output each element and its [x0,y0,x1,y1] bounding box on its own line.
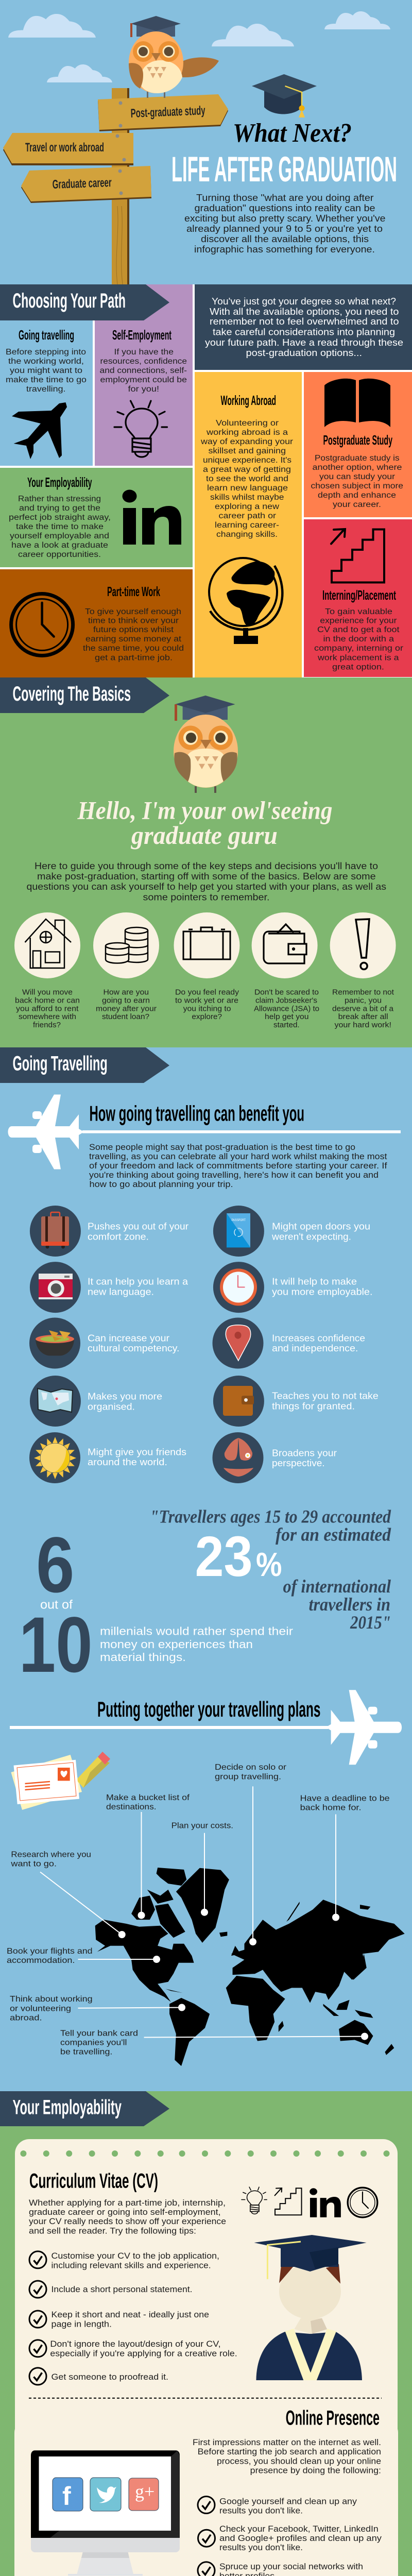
text block [29,2198,226,2235]
quote: travellers 23 percent: for an estimated [276,1524,391,1545]
captions: friends? [33,1021,61,1029]
text block: presence by doing the following: [250,2465,381,2475]
intro paragraph: exciting but also pretty scary. Whether you've [184,213,385,224]
icon: clock [11,594,73,655]
icon: passport: PASSPORT [232,1219,246,1222]
text block: working abroad is a [206,428,288,437]
heading: Working Abroad [220,393,276,408]
intro paragraph [184,193,385,255]
captions: going to earn [102,996,150,1005]
panel: your employability [0,468,193,567]
intro paragraph: discover all the available options, this [201,234,369,244]
world map [95,1868,405,2066]
text block: for you! [128,385,159,394]
map callouts: destinations. [106,1803,157,1811]
captions: Do you feel ready [175,988,239,996]
text block: your future path. Have a read through these [205,337,403,348]
text block: and connections, self- [100,366,187,375]
benefit labels: Can increase your [88,1333,169,1343]
text block: changing skills. [216,530,278,539]
map callouts: Book your flights and [7,1947,93,1956]
text block: learning career- [215,521,279,530]
captions: deserve a bit of a [332,1005,394,1013]
icon: computer monitor with social icons [31,2450,180,2576]
text block: exploring a new [215,502,280,511]
heading: Your Employability [27,474,92,490]
banner: choosing your path [0,284,169,320]
text block: you might want to [10,366,82,375]
text block: chosen subject in more [311,482,403,490]
map callouts: group travelling. [215,1772,281,1781]
stat: 6 out of 10 millenials: out of [40,1598,73,1612]
map callouts: back home for. [300,1803,362,1812]
quote: travellers 23 percent: % [256,1546,282,1583]
stat: 6 out of 10 millenials [19,1521,293,1689]
text block: Before stepping into [6,348,86,357]
icon: google plus: g+ [135,2481,154,2502]
text block: time to think over your [88,616,179,625]
divider [29,2398,382,2399]
text block [311,454,403,509]
quote: travellers 23 percent: of international [283,1576,391,1597]
text block: resources, confidence [100,357,187,366]
intro paragraph: infographic has something for everyone. [194,244,375,255]
checklist: online presence: results you don't like. [219,2506,303,2515]
captions: Don't be scared to [254,988,319,996]
text block: With all the available options, you need to [210,307,399,317]
captions: break after all [338,1013,388,1021]
text block: travelling. [26,385,66,394]
icon: open book [324,379,390,427]
text block [200,419,293,539]
icon: suitcase [174,912,240,978]
text block: take the time to make [16,522,104,531]
panel: postgraduate study [304,372,412,517]
captions: explore? [192,1013,222,1021]
panel: part-time work [0,569,193,677]
text block: Whether applying for a part-time job, internship, [29,2198,226,2208]
icon: wallet [223,1386,254,1416]
banner: covering the basics [0,677,169,713]
text block: earning some money at [85,635,182,643]
text block: you're thinking about going travelling, here's how it can benefit you and [89,1170,379,1180]
icon: plane with trail [8,1094,401,1170]
text block: Volunteering or [216,419,279,428]
header background [0,0,412,284]
benefit labels: Makes you more [88,1392,162,1402]
captions: started. [273,1021,300,1029]
checklist: online presence [198,2497,382,2576]
heading: Self-Employment [112,327,171,343]
text block: make post-graduation, starting off with some of the basics. Below are some [37,871,376,882]
captions: back home or can [15,996,80,1005]
stat: 6 out of 10 millenials: millenials would rather spend their [100,1625,293,1638]
checklist: cv tips: Get someone to proofread it. [52,2372,168,2382]
banner: your employability: Your Employability [12,2096,122,2119]
map callouts: Research where you [11,1850,91,1859]
text block [27,861,386,903]
benefit labels: things for granted. [272,1401,355,1411]
heading: owl'seeing graduate guru: graduate guru [131,821,278,850]
text block: in the door with a [323,635,394,643]
captions: to work yet or are [175,996,238,1005]
map callouts: Have a deadline to be [300,1794,390,1803]
heading: Part-time Work [107,584,160,599]
icon: coins [93,912,159,978]
text block: To gain valuable [325,607,392,616]
captions: help get you [265,1013,309,1021]
captions: you itching to [183,1005,231,1013]
map callouts: be travelling. [60,2048,112,2057]
icon: graduation cap [252,74,317,117]
benefit labels: perspective. [272,1458,325,1468]
text block: Here to guide you through some of the key steps and decisions you'll have to [35,861,378,871]
text block: your career. [333,500,381,509]
checklist: online presence: Google yourself and clean up any [219,2497,357,2506]
text block: learn new language [207,484,288,493]
text block [193,2437,381,2475]
icons: bulb, stairs, in, clock [242,2187,377,2217]
text block: Before starting the job search and application [198,2447,381,2456]
icon: graduate figure [254,2235,367,2380]
benefit labels [88,1221,379,1468]
text block: work placement is a [317,653,399,663]
sign: travel or work abroad [3,133,133,165]
benefit labels: Teaches you to not take [272,1391,379,1401]
icon: globe [209,558,282,644]
banner: going travelling [0,1047,169,1083]
checklist: cv tips: Keep it short and neat - ideally just one [52,2310,209,2319]
text block: graduate career or going into self-employment, [29,2207,221,2217]
captions: Will you move [22,988,73,996]
icon: airplane [12,402,67,459]
section: covering the basics [0,677,412,1047]
checklist: cv tips: Don't ignore the layout/design of your CV, [50,2339,221,2349]
map callouts: or volunteering [10,2005,71,2013]
text block: process, you should clean up your online [217,2456,381,2466]
text block [89,1142,387,1189]
checklist: cv tips: especially if you're applying for a creative role. [50,2348,237,2359]
text block: experience for your [320,616,397,625]
icon: google plus [129,2478,159,2511]
map callouts [7,1763,390,2057]
text block: You've just got your degree so what next? [212,296,396,307]
banner: covering the basics: Covering The Basics [12,683,131,705]
stat: 6 out of 10 millenials: material things. [100,1651,186,1664]
icon: camera [39,1274,73,1299]
panel: working abroad [195,372,302,677]
map callouts: companies you'll [60,2038,127,2047]
title: what next: What Next? [233,118,352,148]
text block: travelling, as you can celebrate all your hard work whilst making the most [89,1151,387,1161]
text block: questions you can ask yourself to help get you started with your plans, as well as [27,882,386,892]
banner: your employability [0,2091,169,2126]
text block: have a look at graduate [11,541,108,550]
text block: way of expanding your [200,437,293,446]
text block: another option, where [312,463,402,472]
text block: perfect job straight away, [9,513,111,522]
text block: CV and to get a foot [317,625,400,634]
text block: company, interning or [314,644,403,653]
icon: plane with trail [10,1690,402,1765]
icon: map pin [226,1325,251,1361]
text block: career path or [218,512,276,520]
captions: Remember to not [332,988,394,996]
icon: owl [174,696,238,793]
text block: skills whilst maybe [210,493,284,502]
text block: unique experience. It's [203,456,291,465]
captions: claim Jobseeker's [255,996,317,1005]
panel: interning/placement [304,519,412,677]
benefit circles [29,1206,264,1483]
icon: bikini [224,1438,253,1477]
intro paragraph: already planned your 9 to 5 or you're yet to [186,224,383,234]
text block [100,348,187,394]
captions: panic, you [345,996,382,1005]
benefit labels: weren't expecting. [271,1231,351,1242]
icon: passport [227,1213,250,1247]
icon: suitcase [41,1212,69,1249]
text block: how to go about planning your trip. [90,1179,233,1189]
intro paragraph: graduation" questions into reality can be [195,203,375,213]
text block: a great way of getting [203,465,291,474]
panel: intro to choosing your path [195,284,412,370]
sign: post-graduate study: Post-graduate study [130,104,206,121]
quote: travellers 23 percent [150,1506,391,1633]
benefit labels: Might give you friends [88,1447,186,1457]
benefit labels: organised. [88,1401,135,1412]
checklist: online presence: results you don't like. [219,2543,303,2552]
intro paragraph: Turning those "what are you doing after [196,193,374,203]
icon: twitter [90,2478,121,2511]
text block [9,495,111,559]
map callouts: abroad. [10,2013,42,2023]
map callouts: accommodation. [7,1956,75,1965]
checklist: online presence: Check your Facebook, Twitter, LinkedIn [219,2524,379,2534]
icon: exclamation mark [330,912,396,978]
icon: house [14,912,80,978]
text block: Rather than stressing [18,495,101,503]
text block: and trying to get the [19,504,100,513]
benefit labels: Broadens your [272,1448,337,1458]
text block: get a part-time job. [95,653,173,663]
sign: travel or work abroad: Travel or work abroad [25,141,104,155]
captions: student loan? [102,1013,149,1021]
icon: folded map [38,1388,73,1412]
checklist: cv tips: Include a short personal statement. [52,2284,193,2294]
captions [15,988,394,1029]
text block: future options whilst [93,625,174,634]
captions: How are you [103,988,149,996]
captions: somewhere with [19,1013,76,1021]
text block: of your freedom and lack of commitments before starting your career. If [89,1161,387,1171]
benefit labels: Increases confidence [272,1333,365,1343]
benefit labels: new language. [88,1287,154,1297]
stat: 6 out of 10 millenials: money on experiences than [100,1638,253,1651]
sign: graduate career: Graduate career [52,176,112,192]
icon: linkedin in [123,489,181,545]
quote: travellers 23 percent: travellers in [309,1594,390,1615]
benefit labels: It will help to make [272,1276,357,1286]
section: your employability [0,2091,412,2576]
benefit labels: Pushes you out of your [88,1221,188,1231]
clouds [8,11,390,82]
text block: some pointers to remember. [143,892,270,903]
heading: Going travelling [19,327,74,343]
text block: post-graduation options... [246,348,362,358]
stat: 6 out of 10 millenials: 6 [36,1521,74,1609]
section: going travelling [0,1047,412,2091]
map callouts: Tell your bank card [60,2029,138,2038]
banner: going travelling: Going Travelling [12,1052,108,1075]
heading: curriculum vitae: Curriculum Vitae (CV) [29,2170,158,2193]
sign: graduate career [21,166,151,203]
icon: letter and pencil [11,1752,110,1810]
captions: money after your [96,1005,157,1013]
captions: Allowance (JSA) to [254,1005,319,1013]
benefit labels: comfort zone. [88,1231,149,1242]
text block: and sell the reader. Try the following tips: [29,2226,196,2235]
text block: Some people might say that post-graduation is the best time to go [89,1142,355,1152]
icon: owl with mortarboard [129,16,219,98]
benefit labels: Might open doors you [272,1221,370,1231]
text block: make the time to go [6,376,87,384]
heading: owl'seeing graduate guru: Hello, I'm your owl'seeing [77,796,333,825]
quote: travellers 23 percent: 2015" [350,1612,391,1633]
map callouts: Decide on solo or [215,1763,287,1772]
map callouts: Plan your costs. [171,1822,233,1831]
panel: self-employment [95,284,193,466]
text block: If you have the [114,348,174,357]
text block: the working world, [8,357,84,366]
card [14,2139,398,2576]
panel: going travelling [0,284,93,466]
icon: wallet [252,912,318,978]
text block: skillset and gaining [208,447,286,455]
benefit labels: It can help you learn a [88,1276,188,1286]
text block: career opportunities. [18,550,101,559]
checklist: cv tips: Customise your CV to the job application, [52,2251,219,2261]
benefit labels: around the world. [88,1457,167,1467]
checklist: online presence: Spruce up your social networks with [219,2562,363,2571]
text block: the same time, you could [83,644,184,653]
text block: First impressions matter on the internet as well. [193,2437,381,2447]
map callouts: want to go. [10,1860,57,1869]
text block [314,607,403,671]
checklist: cv tips: including relevant skills and experience. [52,2260,211,2270]
quote: travellers 23 percent: 23 [195,1525,252,1588]
signpost [3,88,228,284]
map callouts: Make a bucket list of [106,1793,190,1802]
text block: Postgraduate study is [315,454,400,463]
stat: 6 out of 10 millenials: 10 [19,1601,93,1689]
text block: you can study your [319,472,395,481]
icon: bowl of guacamole [36,1330,74,1355]
text block: to see the world and [206,474,288,483]
icon: sun [34,1437,76,1479]
icon: facebook [53,2478,83,2511]
captions: your hard work! [335,1021,391,1029]
icon: clock [220,1268,257,1306]
text block: take careful considerations into planning [213,327,395,337]
heading: owl'seeing graduate guru [77,796,333,850]
text block [205,296,403,358]
captions: you afford to rent [16,1005,78,1013]
icon: facebook: f [62,2482,71,2511]
icon: light bulb [114,401,167,457]
benefit labels: and independence. [272,1343,358,1353]
sign: post-graduate study [98,94,228,131]
benefit labels: you more employable. [272,1287,373,1297]
map callouts: Think about working [10,1995,93,2004]
benefit labels: cultural competency. [88,1343,179,1353]
text block: yourself employable and [10,532,109,540]
text block: To give yourself enough [85,607,181,616]
icon: stairs and arrow [331,529,384,582]
text block: depth and enhance [318,491,396,500]
checklist: online presence: and Google+ profiles and clean up any [219,2533,382,2543]
text block [6,348,87,394]
checklist: cv tips [29,2251,237,2385]
text block: your CV really needs to show off your experience [29,2216,226,2226]
text block: employment could be [100,376,187,384]
banner: choosing your path: Choosing Your Path [12,290,126,312]
text block [83,607,184,663]
checklist: cv tips: page in length. [52,2319,112,2329]
text block: remember not to feel overwhelmed and to [210,316,399,327]
text block: great option. [332,663,384,671]
